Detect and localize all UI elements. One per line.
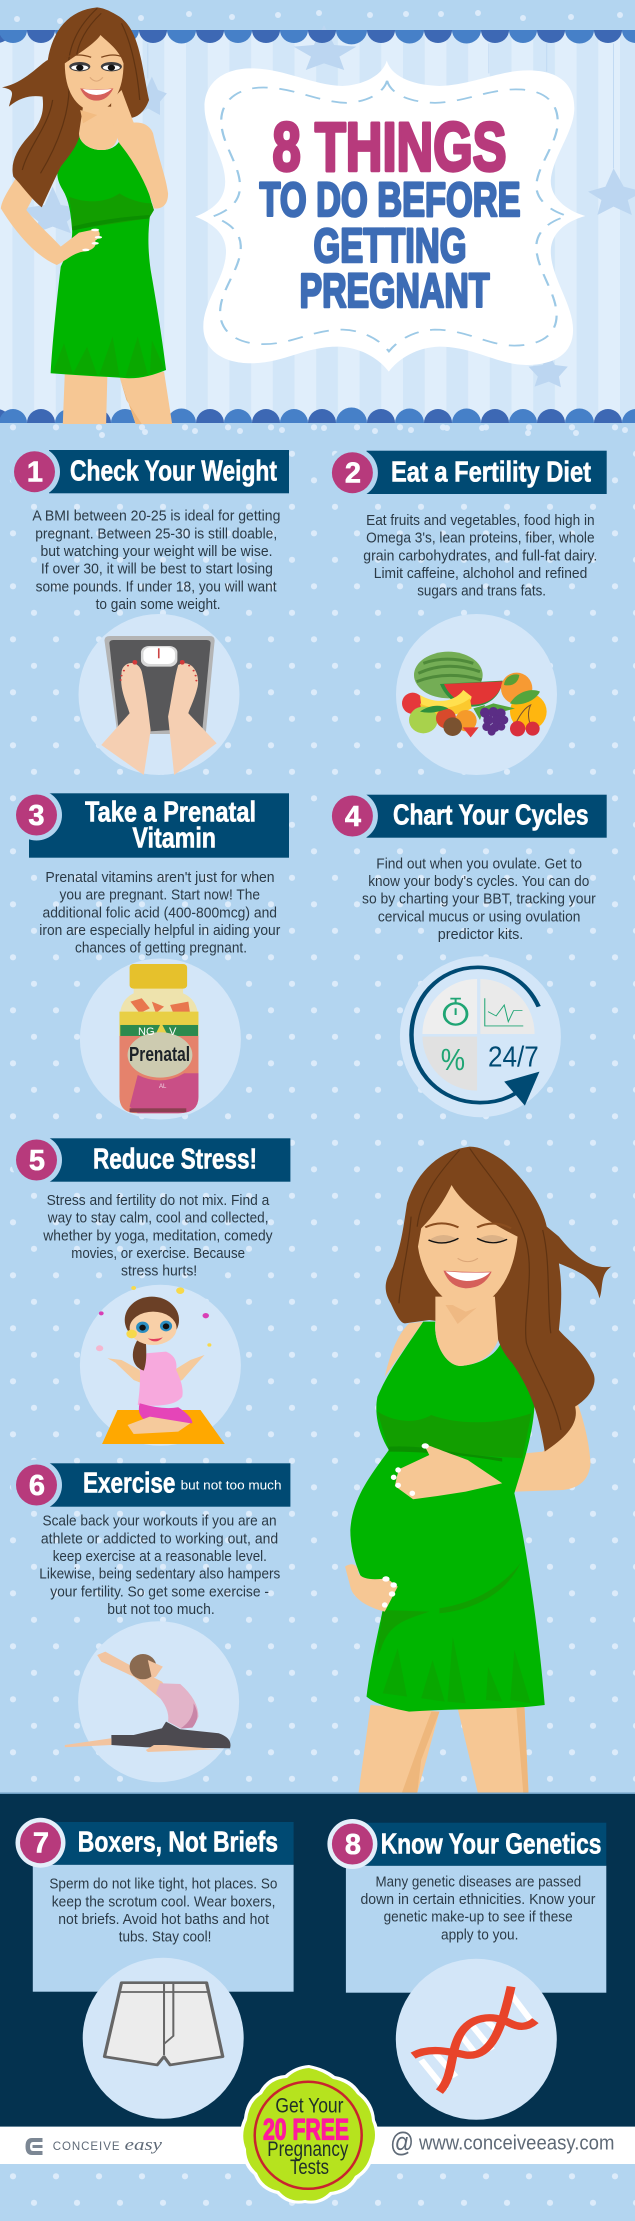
heading bar 4 [327,790,607,842]
text panel 7 [33,1865,294,1992]
text block 2 [363,512,597,600]
icon: prenatal vitamin bottle [80,958,241,1120]
heading bar 8: 8 [345,1829,361,1861]
scalloped trim bottom [0,408,635,423]
heading bar 2: Eat a Fertility Diet [391,456,591,488]
text block 3: Prenatal vitamins aren't just for when [45,869,275,886]
heading bar 7: 7 [33,1828,49,1860]
illustration: pregnant woman cradling belly [345,1147,612,1793]
heading bar 5 [11,1134,290,1186]
heading bar 4: 4 [345,801,361,833]
text block 8: Many genetic diseases are passed [376,1873,581,1890]
text block 5: movies, or exercise. Because [71,1245,245,1262]
text block 4: predictor kits. [438,926,523,943]
text block 2: sugars and trans fats. [417,583,546,600]
text block 3: you are pregnant. Start now! The [60,887,260,904]
text block 6: Scale back your workouts if you are an [42,1513,277,1530]
icon: prenatal vitamin bottle: V [169,1026,177,1038]
text block 1: A BMI between 20-25 is ideal for getting [32,508,280,525]
logo: conceive easy: easy [125,2135,163,2154]
badge: 20 free pregnancy tests: 20 FREE [263,2113,349,2146]
icon: cycle chart: 24/7 [488,1042,539,1074]
heading bar 6 [11,1460,290,1510]
text block 8: down in certain ethnicities. Know your [360,1891,595,1908]
title: TO DO BEFORE [260,174,520,227]
text block 8: apply to you. [441,1926,518,1943]
section 7: boxers, not briefs [16,1818,294,2119]
text block 1 [32,508,280,613]
website address [390,2126,614,2158]
heading bar 5: Reduce Stress! [93,1143,257,1175]
icon: meditating pregnant woman [80,1285,241,1446]
logo: conceive easy [26,2135,163,2155]
text block 6 [39,1513,280,1618]
text block 5: stress hurts! [121,1263,197,1280]
heading bar 1: Check Your Weight [70,456,277,488]
text block 1: pregnant. Between 25-30 is still doable, [35,525,277,542]
icon: prenatal vitamin bottle: NG [138,1026,154,1038]
icon: prenatal vitamin bottle: AL [159,1084,167,1090]
icon: prenatal vitamin bottle: Prenatal [129,1044,190,1066]
heading bar 3: Vitamin [132,823,216,855]
badge: 20 free pregnancy tests [240,2065,378,2204]
section 2: eat a fertility diet [327,447,607,775]
heading bar 2: 2 [345,458,361,490]
heading bar 3: 3 [28,800,45,832]
text block 1: but watching your weight will be wise. [40,543,272,560]
text block 3 [39,869,280,957]
heading bar 6: but not too much [181,1477,282,1492]
text block 4: know your body's cycles. You can do [368,873,589,890]
title: GETTING [314,220,466,273]
hand on hip [57,229,100,265]
scalloped trim top [0,30,635,44]
section 8: know your genetics [327,1819,606,2120]
text block 7 [49,1876,277,1946]
icon: DNA helix [396,1959,557,2120]
text block 2: Omega 3's, lean proteins, fiber, whole [366,530,595,547]
text block 7: Sperm do not like tight, hot places. So [49,1876,277,1893]
text block 1: If over 30, it will be best to start losing [41,561,273,578]
heading bar 3: Take a Prenatal [85,796,256,828]
section 4: chart your cycles [327,790,607,1117]
text panel 8 [346,1866,606,1993]
text block 5: whether by yoga, meditation, comedy [42,1227,273,1244]
text block 2: Eat fruits and vegetables, food high in [366,512,595,529]
text block 7: not briefs. Avoid hot baths and hot [58,1911,270,1928]
text block 6: your fertility. So get some exercise - [50,1583,269,1600]
badge: 20 free pregnancy tests: Pregnancy [267,2138,349,2161]
heading bar 7 [16,1818,294,1868]
text block 7: tubs. Stay cool! [119,1929,211,1946]
text block 5 [42,1192,273,1280]
text block 4: Find out when you ovulate. Get to [376,855,582,872]
icon: boxers [83,1958,244,2119]
text block 6: Likewise, being sedentary also hampers [39,1566,280,1583]
icon: pregnant yoga pose [65,1621,239,1782]
heading bar 1 [9,446,289,497]
heading bar 5: 5 [29,1145,45,1177]
bottom dark panel [0,1792,635,2127]
badge: 20 free pregnancy tests: Get Your [275,2095,344,2118]
text block 3: additional folic acid (400-800mcg) and [42,904,277,921]
section 1: check your weight [9,446,289,775]
title: 8 THINGS [272,108,506,186]
heading bar 2 [327,447,607,498]
text block 4 [362,855,596,943]
text block 2: grain carbohydrates, and full-fat dairy. [363,547,597,564]
title: PREGNANT [300,265,490,318]
section 6: exercise [11,1460,290,1782]
text block 6: keep exercise at a reasonable level. [53,1548,267,1565]
text block 6: athlete or addicted to working out, and [41,1530,278,1547]
icon: feet on scale [78,614,240,775]
heading bar 3 [11,790,289,858]
footer band [0,2126,635,2164]
icon: cycle chart [400,956,561,1117]
text block 6: but not too much. [107,1601,215,1618]
section 3: take a prenatal vitamin [11,790,289,1120]
heading bar 6: Exercise [83,1467,175,1499]
badge: 20 free pregnancy tests: Tests [290,2156,329,2179]
header banner [0,0,635,438]
text block 4: so by charting your BBT, tracking your [362,891,596,908]
icon: fruit pile [396,614,557,775]
text block 1: some pounds. If under 18, you will want [36,578,277,595]
text block 4: cervical mucus or using ovulation [378,908,580,925]
icon: cycle chart: % [441,1042,465,1077]
ornate title frame [195,61,585,372]
text block 2: Limit caffeine, alchohol and refined [374,565,587,582]
heading bar 8 [327,1819,606,1869]
logo: conceive easy: CONCEIVE [53,2141,120,2153]
text block 3: chances of getting pregnant. [75,940,247,957]
stars [22,25,635,387]
text block 5: way to stay calm, cool and collected, [47,1210,268,1227]
text block 8: genetic make-up to see if these [384,1909,573,1926]
heading bar 6: 6 [29,1470,45,1502]
text block 3: iron are especially helpful in aiding your [39,922,280,939]
text block 8 [360,1873,595,1943]
heading bar 7: Boxers, Not Briefs [78,1827,278,1859]
title [260,108,520,318]
illustration: woman in green dress [1,7,172,424]
website address: www.conceiveeasy.com [418,2132,614,2154]
heading bar 4: Chart Your Cycles [393,799,588,831]
text block 7: keep the scrotum cool. Wear boxers, [52,1893,275,1910]
section 5: reduce stress [11,1134,290,1446]
website address: @ [390,2126,414,2158]
text block 5: Stress and fertility do not mix. Find a [47,1192,270,1209]
heading bar 1: 1 [27,457,43,489]
text block 1: to gain some weight. [96,596,221,613]
